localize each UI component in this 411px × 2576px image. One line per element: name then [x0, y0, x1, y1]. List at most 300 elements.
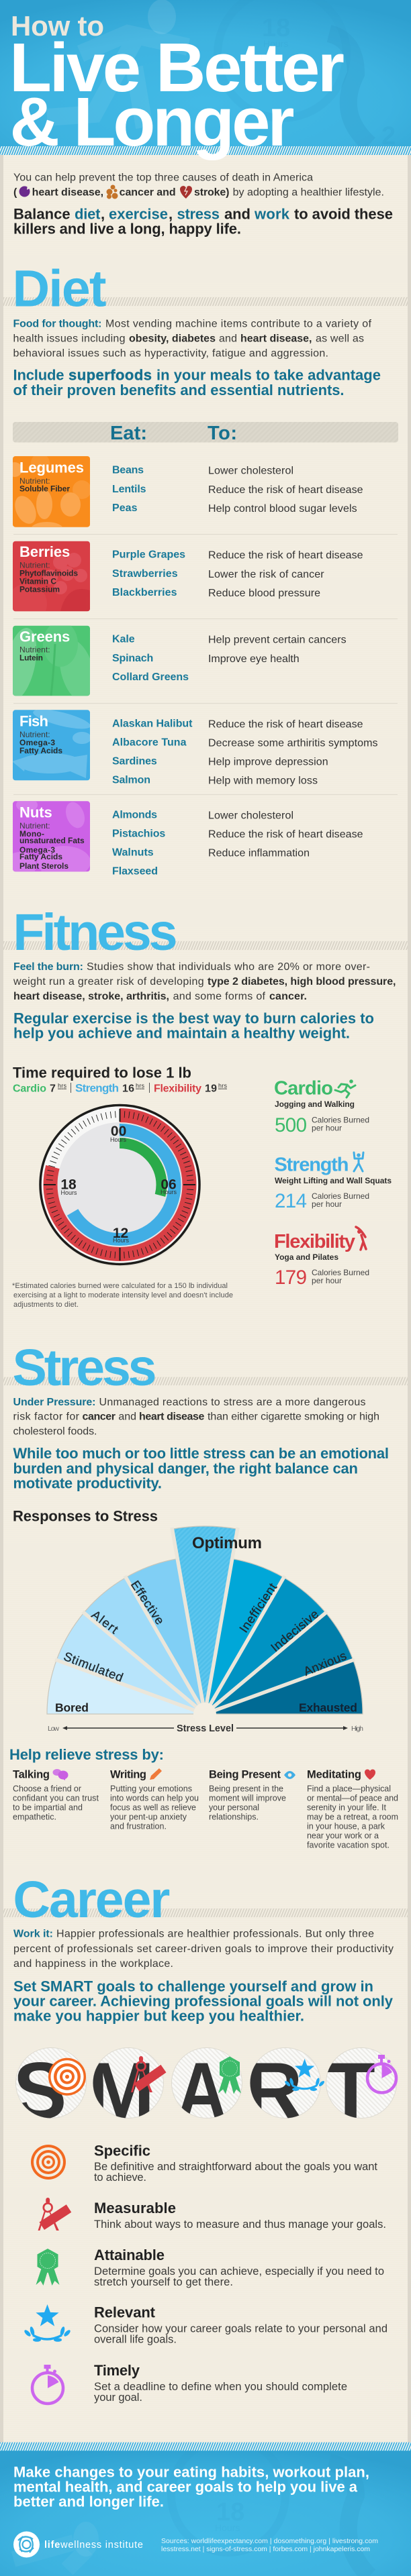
chart: stress response fan: Anxious	[302, 1648, 349, 1678]
sources: Sources: worldlifeexpectancy.com | dosomething.org | livestrong.com	[161, 2537, 378, 2545]
title	[9, 10, 345, 160]
panel: nuts: unsaturated Fats	[19, 836, 85, 845]
section stripe: career	[3, 1909, 408, 1917]
footnote: adjustments to diet.	[13, 1301, 79, 1309]
panel: nuts: Omega-3	[19, 845, 55, 855]
wedge: indecisive	[205, 1578, 326, 1714]
legend: hours per exercise: 16	[122, 1083, 134, 1094]
heading: stress: Stress	[12, 1339, 157, 1397]
column: talking: Talking	[13, 1769, 50, 1781]
list: nuts foods: Almonds	[112, 809, 157, 820]
letter M with compass	[93, 2047, 167, 2118]
panel: legumes: Nutrient:	[19, 476, 50, 486]
column: writing: focus as well as relieve	[110, 1803, 196, 1813]
wedge: exhausted	[205, 1660, 363, 1714]
key message: balance: ,	[101, 206, 105, 223]
icon: broken heart for stroke	[180, 186, 192, 199]
key message: regular exercise: Regular exercise is the best way to burn calories to	[13, 1010, 374, 1026]
letter A with ribbon: A	[177, 2046, 227, 2136]
column: meditating: favorite vacation spot.	[307, 1841, 390, 1850]
chart: radial clock of hours: 06	[161, 1177, 177, 1193]
text block: feel the burn: weight run a greater risk of developing	[13, 976, 204, 987]
column: being present: Being Present	[209, 1769, 281, 1781]
key message: balance: diet	[75, 206, 101, 223]
wedge: optimum	[172, 1526, 238, 1714]
list: nuts foods: Walnuts	[112, 847, 154, 858]
list: legumes benefits: Help control blood sugar levels	[208, 503, 357, 515]
panel: berries: Nutrient:	[19, 561, 50, 570]
panel: strength: Calories Burned	[312, 1191, 369, 1201]
heading: time required: Time required to lose 1 lb	[13, 1065, 191, 1081]
icon: pencil	[150, 1768, 162, 1780]
column: meditating: may be a retreat, a room	[307, 1813, 398, 1822]
list: legumes foods: Lentils	[112, 484, 146, 495]
text block: food for thought: as well as	[316, 333, 364, 344]
column: meditating: in your house, a park	[307, 1822, 385, 1831]
list: legumes benefits: Reduce the risk of heart disease	[208, 484, 363, 496]
intro text	[13, 172, 384, 199]
key message: regular exercise	[13, 1010, 374, 1041]
intro text: You can help prevent the top three causes of death in America	[13, 172, 313, 184]
item: attainable: stretch yourself to get there.	[94, 2276, 233, 2288]
text block: work it: percent of professionals set career-driven goals to improve their productivity	[13, 1943, 394, 1955]
icon: ribbon	[36, 2249, 59, 2286]
panel: nuts: Mono-	[19, 829, 44, 839]
list: legumes benefits	[208, 466, 363, 515]
text block: under pressure: and	[118, 1411, 136, 1423]
footer banner: Hours	[215, 2522, 240, 2533]
panel: flexibility: Calories Burned	[312, 1268, 369, 1277]
heading: career: Career	[13, 1871, 170, 1929]
column: talking: empathetic.	[13, 1813, 56, 1822]
intro text: by adopting a healthier lifestyle.	[233, 187, 384, 199]
title: & Longer	[9, 83, 294, 160]
column: being present: Being present in the	[209, 1784, 283, 1794]
icon: weight lifter	[354, 1152, 363, 1171]
key message: balance: exercise	[109, 206, 168, 223]
column: meditating	[307, 1769, 398, 1850]
section stripe: fitness	[3, 941, 408, 950]
item: attainable	[36, 2247, 384, 2288]
item: timely: your goal.	[94, 2392, 142, 2404]
text block: under pressure: than either cigarette smoking or high	[208, 1411, 379, 1423]
list: berries foods	[112, 549, 185, 598]
text block: feel the burn: cancer.	[269, 991, 307, 1002]
list: nuts foods	[112, 809, 165, 877]
list: legumes foods: Beans	[112, 465, 144, 476]
header banner	[0, 0, 411, 155]
icon: target	[31, 2145, 66, 2180]
legend: hours per exercise: 19	[205, 1083, 217, 1094]
panel: nuts: Fatty Acids	[19, 852, 62, 861]
text block: food for thought: heart disease,	[240, 333, 312, 344]
list: fish benefits: Help with memory loss	[208, 775, 318, 787]
column: meditating: or mental—of peace and	[307, 1794, 398, 1803]
icon: heart	[365, 1770, 375, 1780]
panel: berries: Berries	[19, 543, 70, 560]
wedge: stimulated	[56, 1613, 205, 1714]
chart: radial clock of hours: 18	[60, 1177, 77, 1193]
panel: greens: Greens	[19, 628, 70, 645]
panel: nuts: Nutrient:	[19, 821, 50, 830]
intro text: heart disease,	[32, 187, 103, 199]
wedge: anxious	[205, 1613, 353, 1714]
list: fish benefits: Help improve depression	[208, 757, 328, 768]
list: berries benefits	[208, 550, 363, 599]
text block: under pressure: heart disease	[139, 1411, 204, 1423]
footnote	[12, 1282, 233, 1309]
text block: food for thought	[13, 318, 372, 360]
list: fish benefits: Reduce the risk of heart disease	[208, 719, 363, 731]
key message: superfoods	[13, 367, 381, 398]
list: nuts foods: Flaxseed	[112, 865, 158, 877]
panel: strength: 214	[275, 1190, 307, 1212]
icon: compass and ruler	[38, 2198, 71, 2231]
icon: eye	[284, 1771, 295, 1779]
chart: stress response fan: Bored	[55, 1701, 89, 1715]
panel: cardio: Cardio	[274, 1078, 333, 1099]
text block: under pressure: cancer	[82, 1411, 116, 1423]
item: relevant: Consider how your career goals relate to your personal and	[94, 2323, 387, 2335]
list: nuts benefits	[208, 810, 363, 859]
key message: balance: stress	[177, 206, 220, 223]
panel: flexibility: Flexibility	[274, 1231, 355, 1252]
column: writing	[110, 1768, 199, 1831]
text block: food for thought: health issues including	[13, 333, 125, 344]
panel: flexibility: 179	[275, 1267, 307, 1289]
icon: cancer cells	[106, 185, 118, 199]
text block: food for thought: behavioral issues such as hyperactivity, fatigue and aggression.	[13, 348, 328, 360]
list: fish foods: Alaskan Halibut	[112, 718, 193, 730]
letter S with target: S	[13, 2046, 66, 2136]
list: berries foods: Purple Grapes	[112, 549, 185, 561]
panel: greens	[13, 625, 90, 696]
key message: smart goals: make you happier but keep you healthier.	[13, 2007, 304, 2024]
graphic: SMART letters	[15, 2047, 398, 2118]
icon: speech bubbles	[52, 1769, 68, 1780]
key message: balance: killers and live a long, happy life.	[13, 221, 241, 237]
letter A with ribbon	[171, 2047, 242, 2118]
list: fish foods: Sardines	[112, 756, 157, 767]
panel: fish: Fish	[19, 712, 48, 729]
key message: superfoods: of their proven benefits and essential nutrients.	[13, 382, 344, 398]
key message: balance of stress: burden and physical danger, the right balance can	[13, 1460, 358, 1477]
list: nuts benefits: Reduce inflammation	[208, 847, 310, 859]
chart: stress response fan: Stimulated	[62, 1649, 125, 1684]
footer banner	[0, 2438, 411, 2576]
item: timely: Timely	[94, 2362, 140, 2379]
text block: feel the burn: and some forms of	[173, 991, 266, 1002]
chart: stress response fan: Exhausted	[299, 1701, 357, 1715]
table header: eat and to	[13, 422, 398, 444]
column: talking: to be impartial and	[13, 1803, 83, 1813]
panel: fish	[12, 706, 92, 780]
axis: stress level: High	[351, 1725, 363, 1733]
list: fish benefits	[208, 719, 377, 787]
item: measurable: Measurable	[94, 2200, 176, 2216]
table header: eat and to: To:	[208, 423, 237, 444]
icon: star and laurel	[24, 2304, 71, 2342]
text block: work it: Work it:	[13, 1929, 53, 1940]
intro text: stroke)	[194, 187, 230, 199]
sources	[161, 2537, 378, 2553]
legend: hours per exercise: Strength	[75, 1081, 119, 1094]
key message: balance: to avoid these	[294, 206, 393, 223]
section stripe: stress	[3, 1377, 408, 1385]
chart: stress response fan	[47, 1526, 363, 1725]
icon: swirl logo mark	[13, 2532, 40, 2557]
legend: hours per exercise: Flexibility	[154, 1083, 201, 1094]
text block: feel the burn: Studies show that individuals who are 20% or more over-	[87, 961, 370, 973]
list: nuts benefits: Reduce the risk of heart disease	[208, 828, 363, 840]
key message: superfoods: Include	[13, 367, 64, 384]
key message: balance of stress	[13, 1445, 389, 1491]
letter T with stopwatch: T	[326, 2046, 375, 2136]
header banner: 18	[262, 14, 290, 42]
closing message: Make changes to your eating habits, workout plan,	[13, 2463, 369, 2480]
text block: work it	[13, 1929, 394, 1970]
panel: fish: Nutrient:	[19, 730, 50, 739]
panel: nuts: Plant Sterols	[19, 861, 68, 871]
column: writing: into words can help you	[110, 1794, 199, 1803]
header banner: 2	[381, 122, 396, 150]
chart: radial clock of hours: Hours	[110, 1136, 126, 1143]
item: timely	[32, 2362, 347, 2404]
text block: feel the burn: Feel the burn:	[13, 961, 83, 973]
text block: work it: and happiness in the workplace.	[13, 1958, 173, 1970]
text block: food for thought: obesity, diabetes	[129, 333, 216, 344]
list: nuts benefits: Lower cholesterol	[208, 810, 293, 821]
key message: balance: Balance	[13, 206, 71, 223]
logo: life wellness institute: lifewellness institute	[44, 2540, 143, 2551]
item: specific: Be definitive and straightforward about the goals you want	[94, 2161, 377, 2173]
text block: work it: Happier professionals are healthier professionals. But only three	[56, 1929, 374, 1940]
icon: runner	[335, 1079, 355, 1097]
panel: cardio: per hour	[312, 1123, 342, 1132]
list: greens foods	[112, 634, 189, 683]
axis: stress level: Stress Level	[177, 1723, 234, 1734]
panel: cardio: Jogging and Walking	[275, 1099, 355, 1109]
panel: legumes: Legumes	[19, 459, 84, 476]
closing message: mental health, and career goals to help you live a	[13, 2478, 358, 2495]
icon: heart disease	[19, 185, 31, 197]
chart: radial clock of hours: 12	[113, 1226, 128, 1241]
chart: stress response fan: Optimum	[192, 1534, 262, 1552]
section stripe: diet	[3, 297, 408, 306]
chart: stress response fan: Alert	[89, 1607, 121, 1636]
item: specific: Specific	[94, 2142, 150, 2159]
footer banner: 18	[216, 2498, 244, 2526]
panel: strength: Weight Lifting and Wall Squats	[275, 1176, 392, 1185]
wedge: alert	[84, 1578, 205, 1714]
list: berries foods: Blackberries	[112, 587, 177, 598]
list: greens benefits: Help prevent certain cancers	[208, 635, 347, 646]
chart: stress response fan: Indecisive	[268, 1607, 321, 1654]
item: specific	[31, 2142, 377, 2184]
text block: food for thought: Food for thought:	[13, 318, 102, 329]
logo: life wellness institute	[13, 2532, 143, 2557]
column: being present: moment will improve	[209, 1794, 286, 1803]
key message: regular exercise: help you achieve and maintain a healthy weight.	[13, 1024, 350, 1041]
column: meditating: Find a place—physical	[307, 1784, 391, 1794]
heading: help relieve stress: Help relieve stress by:	[9, 1746, 164, 1763]
legend: hours per exercise: hrs	[136, 1083, 145, 1089]
header banner: Hours	[263, 38, 288, 49]
panel: strength: Strength	[274, 1155, 349, 1176]
footnote: exercising at a light to moderate intensity level and doesn't include	[13, 1291, 233, 1299]
item: measurable: Think about ways to measure and thus manage your goals.	[94, 2218, 386, 2231]
text block: under pressure: Under Pressure:	[13, 1397, 95, 1408]
key message: balance: and	[224, 206, 250, 223]
column: being present: your personal	[209, 1803, 259, 1813]
panel: fish: Omega-3	[19, 738, 55, 747]
list: legumes foods	[112, 465, 146, 514]
panel: berries: Vitamin C	[19, 577, 56, 586]
panel: nuts	[13, 801, 90, 872]
panel: strength: per hour	[312, 1199, 342, 1209]
list: fish foods	[112, 718, 193, 786]
key message: smart goals: your career. Achieving professional goals will not only	[13, 1992, 394, 2009]
list: nuts foods: Pistachios	[112, 828, 165, 839]
column: meditating: serenity in your life. It	[307, 1803, 387, 1813]
sources: lesstress.net | signs-of-stress.com | forbes.com | johnkapeleris.com	[161, 2545, 370, 2553]
panel: cardio: 500	[275, 1114, 307, 1136]
key message: balance of stress: While too much or too little stress can be an emotional	[13, 1445, 389, 1462]
item: relevant: Relevant	[94, 2304, 156, 2321]
closing message: better and longer life.	[13, 2493, 164, 2510]
key message: smart goals: Set SMART goals to challenge yourself and grow in	[13, 1978, 373, 1994]
closing message	[13, 2463, 369, 2510]
panel: berries: Potassium	[19, 585, 60, 594]
key message: smart goals	[13, 1978, 394, 2024]
panel: strength	[274, 1152, 392, 1212]
list: greens benefits	[208, 635, 347, 665]
panel: flexibility: Yoga and Pilates	[275, 1252, 338, 1262]
text block: feel the burn: heart disease, stroke, arthritis,	[13, 991, 169, 1002]
chart: radial clock of hours	[40, 1106, 201, 1267]
list: fish foods: Albacore Tuna	[112, 737, 187, 749]
column: writing: and frustration.	[110, 1822, 167, 1831]
footnote: *Estimated calories burned were calculated for a 150 lb individual	[12, 1282, 228, 1290]
list: greens foods: Kale	[112, 634, 135, 645]
panel: legumes: Soluble Fiber	[19, 484, 70, 494]
column: writing: your pent-up anxiety	[110, 1813, 187, 1822]
column: meditating: Meditating	[307, 1769, 361, 1781]
list: legumes foods: Peas	[112, 502, 138, 514]
list: fish benefits: Decrease some arthiritis symptoms	[208, 738, 377, 749]
text block: feel the burn: type 2 diabetes, high blood pressure,	[208, 976, 396, 987]
text block: under pressure: Unmanaged reactions to stress are a more dangerous	[99, 1397, 365, 1408]
column: talking: confidant you can trust	[13, 1794, 99, 1803]
panel: flexibility	[274, 1227, 369, 1289]
key message: balance: ,	[169, 206, 173, 223]
intro text: cancer and	[120, 187, 176, 199]
legend: hours per exercise	[13, 1081, 227, 1094]
column: being present: relationships.	[209, 1813, 259, 1822]
item: timely: Set a deadline to define when you should complete	[94, 2381, 347, 2393]
wedge: effective	[126, 1559, 205, 1714]
item: relevant: overall life goals.	[94, 2334, 177, 2346]
chart: radial clock of hours: Hours	[161, 1189, 177, 1195]
column: writing: Writing	[110, 1769, 146, 1781]
column: writing: Putting your emotions	[110, 1784, 192, 1794]
chart: radial clock of hours: Hours	[113, 1237, 129, 1244]
key message: superfoods: superfoods	[68, 367, 152, 384]
chart: radial clock of hours: 00	[111, 1124, 126, 1139]
legend: hours per exercise: hrs	[58, 1083, 67, 1089]
letter S with target	[15, 2047, 87, 2118]
key message: superfoods: in your meals to take advantage	[156, 367, 381, 384]
key message: balance: work	[254, 206, 290, 223]
legend: hours per exercise: Cardio	[13, 1083, 46, 1094]
item: relevant	[24, 2304, 387, 2346]
panel: flexibility: per hour	[312, 1276, 342, 1285]
chart: stress response fan: Inefficient	[236, 1580, 279, 1635]
item: attainable: Determine goals you can achieve, especially if you need to	[94, 2265, 384, 2277]
heading: diet: Diet	[12, 260, 106, 318]
list: greens foods: Spinach	[112, 653, 153, 664]
text block: under pressure: cholesterol foods.	[13, 1426, 97, 1438]
list: legumes benefits: Lower cholesterol	[208, 466, 293, 477]
text block: food for thought: Most vending machine items contribute to a variety of	[105, 318, 372, 329]
letter T with stopwatch	[326, 2047, 398, 2118]
list: fish foods: Salmon	[112, 775, 150, 786]
text block: feel the burn	[13, 961, 396, 1002]
wedge: bored	[47, 1660, 205, 1714]
legend: hours per exercise: hrs	[218, 1083, 227, 1089]
title: How to	[11, 10, 104, 42]
column: being present	[209, 1769, 295, 1822]
axis: stress level	[48, 1723, 363, 1734]
list: greens benefits: Improve eye health	[208, 653, 300, 665]
legend: hours per exercise: 7	[50, 1083, 56, 1094]
icon: stopwatch	[32, 2365, 63, 2404]
list: berries benefits: Reduce blood pressure	[208, 588, 320, 599]
heading: fitness: Fitness	[13, 904, 177, 961]
panel: greens: Lutein	[19, 653, 43, 663]
text block: under pressure	[13, 1397, 379, 1438]
letter R with star	[250, 2047, 324, 2118]
column: talking	[13, 1769, 99, 1822]
panel: greens: Nutrient:	[19, 645, 50, 655]
panel: cardio: Calories Burned	[312, 1115, 369, 1124]
key message: balance	[13, 206, 393, 237]
axis: stress level: Low	[48, 1725, 59, 1733]
list: greens foods: Collard Greens	[112, 672, 189, 683]
table header: eat and to: Eat:	[110, 423, 147, 444]
panel: berries: Phytoflavinoids	[19, 569, 78, 578]
list: berries foods: Strawberries	[112, 568, 178, 580]
panel: fish: Fatty Acids	[19, 746, 62, 755]
panel: legumes	[13, 456, 90, 527]
wedge: inefficient	[205, 1559, 283, 1714]
intro text: (	[13, 187, 17, 199]
letter R with star: R	[244, 2046, 303, 2136]
column: meditating: near your work or a	[307, 1831, 379, 1841]
list: berries benefits: Reduce the risk of heart disease	[208, 550, 363, 561]
icon: stretching figure	[356, 1227, 366, 1250]
panel: nuts: Nuts	[19, 804, 52, 820]
key message: balance of stress: motivate productivity.	[13, 1474, 162, 1491]
column: talking: Choose a friend or	[13, 1784, 81, 1794]
item: measurable	[38, 2198, 386, 2231]
heading: responses to stress: Responses to Stress	[13, 1508, 158, 1525]
item: attainable: Attainable	[94, 2247, 165, 2263]
panel: berries	[13, 541, 90, 612]
chart: stress response fan: Effective	[128, 1578, 167, 1627]
text block: food for thought: and	[219, 333, 237, 344]
list: berries benefits: Lower the risk of cancer	[208, 569, 324, 580]
